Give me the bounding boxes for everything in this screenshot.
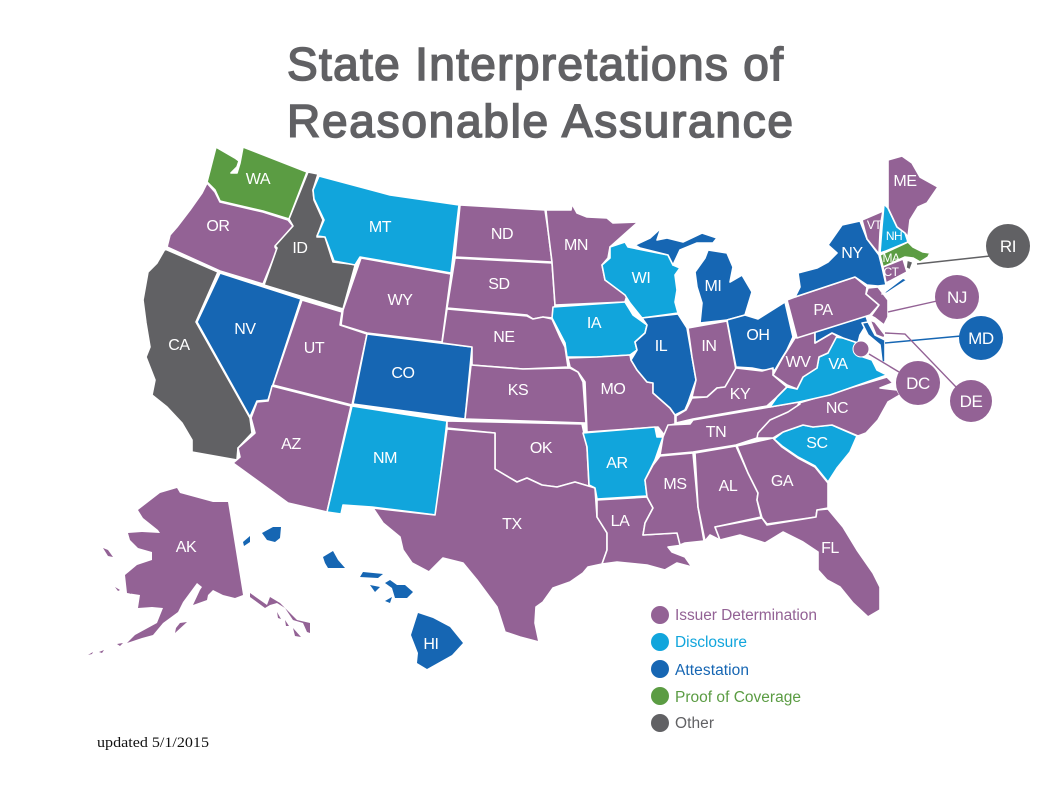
callout: DE <box>885 333 992 422</box>
state: Texas: TX <box>502 516 523 533</box>
callout: MD: MD <box>968 329 994 348</box>
state: Ohio <box>727 302 793 370</box>
state: Kentucky <box>676 368 787 423</box>
state: Washington: WA <box>246 171 271 188</box>
legend item: Attestation <box>651 660 749 679</box>
state: Arkansas <box>583 427 663 499</box>
state: Wisconsin <box>602 242 680 318</box>
state: North Dakota: ND <box>491 226 513 243</box>
state: Virginia <box>770 337 887 407</box>
state: West Virginia <box>773 332 837 389</box>
state: Tennessee: TN <box>706 424 726 441</box>
state: New Jersey <box>866 287 888 325</box>
state: Alaska <box>88 488 310 655</box>
state: Missouri <box>568 355 675 436</box>
state: Oregon <box>167 183 293 284</box>
state: Maine <box>888 156 938 237</box>
callout: RI: RI <box>1000 237 1016 256</box>
state: Georgia <box>737 438 828 524</box>
state: Indiana: IN <box>701 338 717 355</box>
state: Oregon: OR <box>206 218 230 235</box>
state: Arizona <box>233 386 351 512</box>
state: Nebraska <box>442 309 568 369</box>
state: Oklahoma: OK <box>530 440 553 457</box>
state: California <box>143 249 252 460</box>
state: New Hampshire: NH <box>886 229 902 243</box>
legend item: Disclosure: Disclosure <box>675 634 747 651</box>
state: Maine: ME <box>893 173 917 190</box>
state: Michigan: MI <box>705 278 721 295</box>
legend item: Other <box>651 714 714 732</box>
state: Illinois: IL <box>655 338 668 355</box>
title <box>287 38 793 147</box>
state: Vermont: VT <box>867 218 882 232</box>
state: Arizona: AZ <box>281 436 301 453</box>
title: Reasonable Assurance <box>287 95 793 147</box>
state: Mississippi: MS <box>663 476 687 493</box>
state: West Virginia: WV <box>786 354 811 371</box>
state: New Mexico <box>327 406 447 515</box>
callout: DC: DC <box>906 374 930 393</box>
state: Tennessee <box>660 402 799 455</box>
state: Delaware <box>870 320 885 338</box>
state: Pennsylvania: PA <box>813 302 833 319</box>
state: Iowa <box>552 302 647 357</box>
state: Arkansas: AR <box>606 455 628 472</box>
callout: DC <box>853 341 940 405</box>
state: New York <box>795 221 907 297</box>
state: Hawaii <box>243 527 463 669</box>
state: Hawaii: HI <box>423 636 439 653</box>
state: Massachusetts: MA <box>882 251 900 265</box>
state: Missouri: MO <box>601 381 625 398</box>
state: North Carolina: NC <box>826 400 848 417</box>
legend item: Proof of Coverage: Proof of Coverage <box>675 689 801 706</box>
state: Oklahoma <box>447 421 595 488</box>
state: Florida: FL <box>821 540 839 557</box>
state: Indiana <box>688 321 736 397</box>
state: Ohio: OH <box>746 327 770 344</box>
state: Wyoming: WY <box>388 292 413 309</box>
state: Colorado <box>353 334 472 419</box>
state: South Dakota: SD <box>488 276 510 293</box>
state: California: CA <box>168 337 190 354</box>
state: Kentucky: KY <box>730 386 751 403</box>
state: Iowa: IA <box>587 315 602 332</box>
callout: RI <box>917 224 1030 268</box>
state: Idaho <box>264 172 356 309</box>
legend item: Other: Other <box>675 715 714 732</box>
state: Virginia: VA <box>828 356 848 373</box>
state: Pennsylvania <box>787 277 879 338</box>
legend item: Attestation: Attestation <box>675 662 749 679</box>
state: Nebraska: NE <box>493 329 515 346</box>
state: Idaho: ID <box>292 240 308 257</box>
callout: NJ <box>888 275 979 319</box>
state: Connecticut: CT <box>884 265 900 279</box>
state: Maryland <box>815 316 885 362</box>
state: Nevada <box>197 273 301 417</box>
callout: DE: DE <box>960 392 982 411</box>
state: Michigan <box>635 228 752 323</box>
callout: MD <box>885 316 1003 360</box>
state: Kansas: KS <box>508 382 528 399</box>
state: Montana: MT <box>369 219 392 236</box>
state: Rhode Island <box>906 260 913 270</box>
update note: updated 5/1/2015 <box>97 735 209 751</box>
state: New Hampshire <box>880 204 908 253</box>
state: Wisconsin: WI <box>632 270 650 287</box>
state: New York: NY <box>841 245 863 262</box>
state: Utah <box>273 300 367 405</box>
state: Alabama <box>695 446 761 541</box>
state: Massachusetts <box>880 242 930 267</box>
state: Utah: UT <box>304 340 325 357</box>
state: Colorado: CO <box>391 365 415 382</box>
legend item: Issuer Determination: Issuer Determination <box>675 607 817 624</box>
state: Washington <box>207 147 307 219</box>
state: Wyoming <box>341 258 451 342</box>
state: Louisiana: LA <box>611 513 630 530</box>
state: New Mexico: NM <box>373 450 397 467</box>
callout: NJ: NJ <box>947 288 967 307</box>
state: Vermont <box>862 211 883 254</box>
state: Louisiana <box>597 497 692 570</box>
map of US states <box>88 147 938 669</box>
state: Montana <box>313 176 459 273</box>
state: Texas <box>373 429 607 642</box>
state: Georgia: GA <box>771 473 794 490</box>
state: South Dakota <box>447 258 555 319</box>
state: Minnesota: MN <box>564 237 588 254</box>
state: South Carolina: SC <box>806 435 828 452</box>
state: Florida <box>715 509 880 617</box>
state: Connecticut <box>883 259 907 283</box>
state: Alaska: AK <box>176 539 197 556</box>
state: South Carolina <box>774 425 857 482</box>
title: State Interpretations of <box>287 38 783 90</box>
state: Mississippi <box>643 453 704 545</box>
state: North Carolina <box>757 377 900 438</box>
small-state callouts <box>853 224 1030 422</box>
state: Illinois <box>631 314 696 415</box>
legend <box>651 606 817 732</box>
state: Alabama: AL <box>719 478 738 495</box>
state: Minnesota <box>546 204 638 305</box>
state: Nevada: NV <box>234 321 256 338</box>
state: North Dakota <box>455 205 552 262</box>
state: Kansas <box>465 365 586 423</box>
